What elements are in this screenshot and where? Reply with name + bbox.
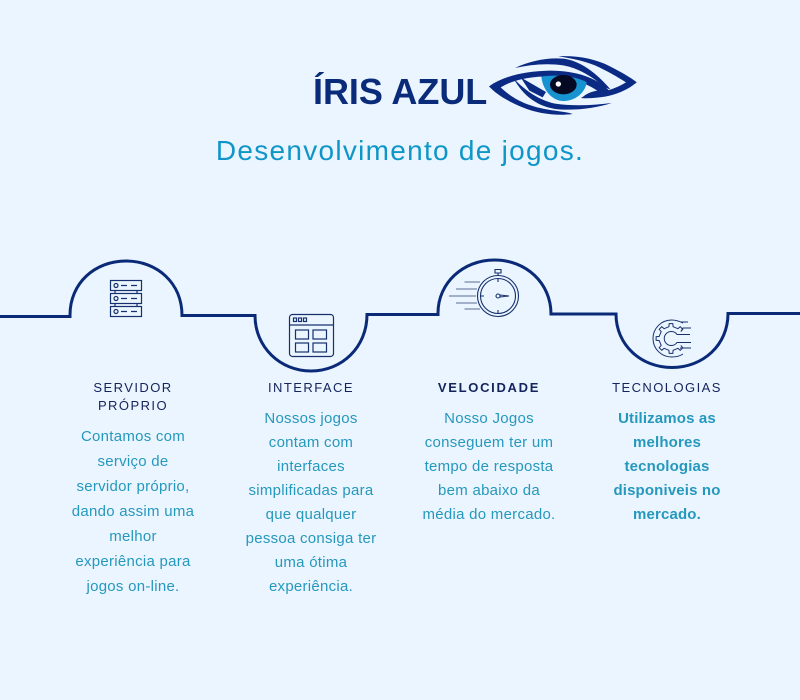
- text: jogos on-line.: [86, 578, 180, 595]
- subtitle: Desenvolvimento de jogos.: [216, 135, 584, 166]
- text: pessoa consiga ter: [246, 530, 376, 547]
- text: [422, 410, 556, 523]
- text: serviço de: [97, 453, 169, 470]
- text: servidor próprio,: [77, 478, 189, 495]
- icon: interface window: [288, 314, 334, 358]
- text: contam com: [269, 434, 353, 451]
- column: velocidade: [422, 380, 556, 523]
- text: experiência.: [269, 578, 353, 595]
- text: Nossos jogos: [264, 410, 358, 427]
- icon: server: [110, 280, 142, 318]
- text: [613, 410, 721, 523]
- text: Contamos com: [81, 428, 185, 445]
- icon: stopwatch: [449, 269, 520, 317]
- text: mercado.: [633, 506, 701, 523]
- text: simplificadas para: [249, 482, 373, 499]
- text: melhor: [109, 528, 157, 545]
- icon: technology gear: [652, 320, 691, 358]
- text: bem abaixo da: [438, 482, 540, 499]
- heading: SERVIDOR: [93, 380, 173, 395]
- text: média do mercado.: [422, 506, 556, 523]
- logo: eye: [489, 56, 637, 115]
- text: uma ótima: [275, 554, 347, 571]
- text: Utilizamos as: [618, 410, 716, 427]
- text: melhores: [633, 434, 701, 451]
- heading: PRÓPRIO: [98, 398, 168, 413]
- text: conseguem ter um: [425, 434, 553, 451]
- title: ÍRIS AZUL: [313, 71, 487, 112]
- text: experiência para: [75, 553, 191, 570]
- heading: INTERFACE: [268, 380, 354, 395]
- column: interface: [246, 380, 376, 595]
- text: disponiveis no: [613, 482, 721, 499]
- text: interfaces: [277, 458, 345, 475]
- heading: [93, 380, 173, 413]
- text: tecnologias: [624, 458, 710, 475]
- text: tempo de resposta: [425, 458, 553, 475]
- heading: VELOCIDADE: [438, 380, 540, 395]
- text: Nosso Jogos: [444, 410, 534, 427]
- column: servidor próprio: [72, 380, 194, 595]
- text: [246, 410, 376, 595]
- text: [72, 428, 194, 595]
- text: que qualquer: [266, 506, 356, 523]
- heading: TECNOLOGIAS: [612, 380, 722, 395]
- column: tecnologias: [612, 380, 722, 523]
- text: dando assim uma: [72, 503, 194, 520]
